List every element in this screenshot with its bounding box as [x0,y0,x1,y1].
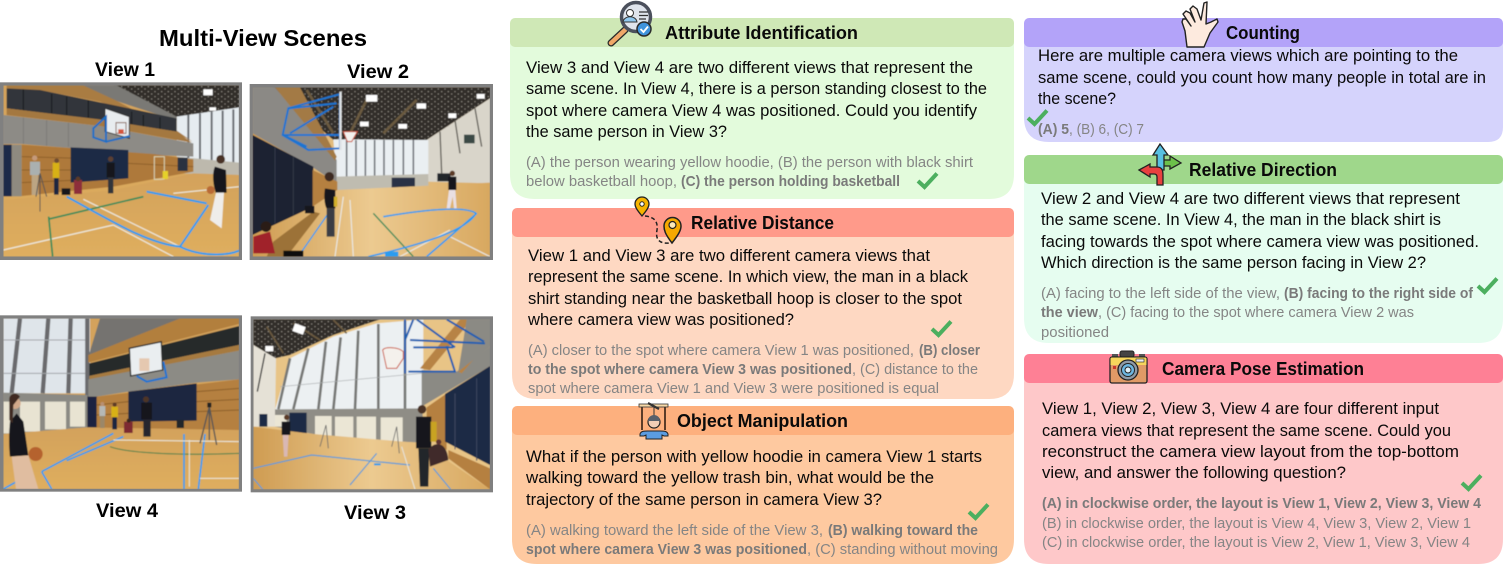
answer options: spot where camera View 1 and View 3 were positioned is equal [528,380,939,397]
icon: camera [1110,351,1147,383]
icon: check mark [1462,476,1481,489]
photo: View 4 [0,315,242,492]
answer options: (A) in clockwise order, the layout is View 1, View 2, View 3, View 4 [1042,495,1482,512]
icon: check mark [1478,278,1497,292]
question text: where camera view was positioned? [527,310,794,329]
question text [1042,399,1459,482]
answer options: below basketball hoop, [526,173,677,190]
answer options [1042,495,1482,551]
answer options: , (C) standing without moving [807,541,998,558]
answer options: , (C) distance to the [852,361,978,378]
icon: check mark [969,504,988,518]
answer options: (A) facing to the left side of the view, [1041,285,1280,302]
question text [525,447,982,509]
panel: Relative Direction [1024,144,1503,343]
question text: trajectory of the same person in camera View 3? [526,490,882,509]
question text: View 1 and View 3 are two different camera views that [528,246,930,265]
question text: View 3 and View 4 are two different views that represent the [526,58,973,77]
question text: walking toward the yellow trash bin, what would be the [525,468,934,487]
question text: Which direction is the same person facing in View 2? [1041,253,1426,272]
icon: hand [1182,2,1218,47]
question text: Here are multiple camera views which are pointing to the [1038,46,1458,65]
question text: View 1, View 2, View 3, View 4 are four different input [1042,399,1439,418]
question text: What if the person with yellow hoodie in camera View 1 starts [526,447,982,466]
icon: check mark [1028,110,1047,124]
answer options [1041,285,1474,341]
label: View 2: View 2 [347,62,409,83]
heading: Relative Direction [1189,160,1337,180]
label: View 1: View 1 [95,60,155,81]
panel: Relative Distance [512,208,1014,399]
answer options: (C) in clockwise order, the layout is View 2, View 1, View 3, View 4 [1042,534,1470,551]
answer options: (B) in clockwise order, the layout is View 4, View 3, View 2, View 1 [1042,515,1471,532]
icon: magnifier with person card [611,2,651,43]
answer options [526,154,974,190]
question text: facing towards the spot where camera view was positioned. [1041,232,1479,251]
question text [527,246,968,329]
photo: View 3 [251,316,493,492]
question text [526,58,987,141]
answer options [1038,121,1144,138]
answer options: to the spot where camera View 3 was positioned [528,361,852,378]
answer options: (B) closer [919,342,980,359]
answer options [528,342,980,397]
icon: check mark [932,322,951,335]
panel: Counting [1024,2,1503,142]
answer options: (A) the person wearing yellow hoodie, (B) the person with black shirt [526,154,974,171]
icon: puppet [639,403,668,439]
heading: Relative Distance [691,213,834,233]
question text: View 2 and View 4 are two different views that represent [1041,189,1460,208]
heading: Camera Pose Estimation [1162,359,1364,379]
question text: spot where camera View 4 was positioned. Could you identify [526,101,977,120]
answer options: (A) walking toward the left side of the View 3, [526,522,823,539]
question text: shirt standing near the basketball hoop is closer to the spot [528,289,962,308]
answer options: (B) facing to the right side of [1284,285,1474,302]
answer options: , (C) facing to the spot where camera View 2 was [1098,304,1414,321]
answer options: , (B) 6, (C) 7 [1069,121,1144,138]
answer options: (C) the person holding basketball [681,173,900,190]
photo: View 2 [250,84,493,260]
answer options: spot where camera View 3 was positioned [526,541,807,558]
question text: the scene? [1038,89,1116,108]
icon: check mark [918,174,937,187]
heading: Object Manipulation [677,411,848,431]
heading: Counting [1226,23,1300,43]
question text: view, and answer the following question? [1042,463,1346,482]
panel: Attribute Identification [510,2,1014,199]
question text [1038,46,1486,108]
icon: direction arrows [1139,144,1181,185]
photo: View 1 [0,82,242,260]
answer options: the view [1041,304,1098,321]
answer options: (A) closer to the spot where camera View 1 was positioned, [528,342,914,359]
panel: Camera Pose Estimation [1024,351,1503,564]
question text: represent the same scene. In which view, the man in a black [528,267,968,286]
title: Multi-View Scenes: Multi-View Scenes [159,25,367,51]
answer options [526,522,998,558]
label: View 4: View 4 [96,501,158,522]
answer options: (A) 5 [1038,121,1069,138]
question text: same scene, could you count how many people in total are in [1038,68,1486,87]
question text: the same person in View 3? [526,122,727,141]
answer options: (B) walking toward the [828,522,978,539]
question text: same scene. In View 4, there is a person standing closest to the [526,79,987,98]
answer options: positioned [1041,324,1109,341]
question text [1041,189,1479,272]
icon: map pins with dashed route [635,197,681,243]
question text: the same scene. In View 4, the man in the black shirt is [1041,210,1441,229]
panel: Object Manipulation [512,403,1014,564]
heading: Attribute Identification [665,23,858,43]
label: View 3: View 3 [344,503,406,524]
question text: reconstruct the camera view layout from the top-bottom [1042,442,1459,461]
question text: camera views that represent the same scene. Could you [1042,421,1451,440]
